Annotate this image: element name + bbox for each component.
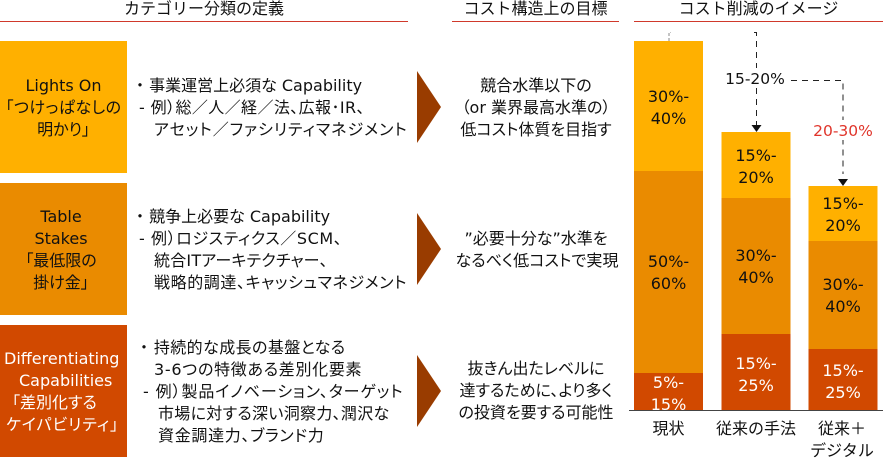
bar: current state xyxy=(634,41,703,414)
text block: Differentiating Capabilities definition: 資金調達力、ブランド力 xyxy=(158,426,324,445)
text block: row 3 goal: 抜きん出たレベルに xyxy=(468,359,604,378)
chart baseline xyxy=(629,410,883,412)
panel: Differentiating Capabilities category: Differentiating xyxy=(4,349,119,368)
bar: current state: 30%- xyxy=(648,87,689,106)
panel: Table Stakes category xyxy=(0,183,127,315)
text block: row 2 goal xyxy=(455,229,619,270)
text block: Table Stakes definition: ・ 競争上必要な Capability xyxy=(136,207,330,226)
text block: row 3 goal xyxy=(458,359,614,422)
callout: 20-30%: 20-30% xyxy=(813,122,873,140)
axis labels xyxy=(652,419,874,460)
bar: traditional method xyxy=(722,132,790,410)
heading: cost reduction image xyxy=(634,0,883,22)
bar: traditional plus digital xyxy=(808,186,878,410)
axis labels: 現状 xyxy=(652,419,685,438)
callout: 15-20%: 15-20% xyxy=(725,70,785,88)
panel: Differentiating Capabilities category: 「差別化する xyxy=(12,393,97,412)
icon: arrowhead to traditional bar xyxy=(752,125,762,132)
bar: current state: 40% xyxy=(651,109,686,128)
dashed reduction arrows xyxy=(669,32,843,174)
panel: Differentiating Capabilities category xyxy=(0,325,127,457)
text block: row 3 goal: の投資を要する可能性 xyxy=(458,403,614,422)
text block: Differentiating Capabilities definition: 市場に対する深い洞察力、潤沢な xyxy=(158,404,390,423)
text block: Table Stakes definition: 戦略的調達、キャッシュマネジメント xyxy=(154,273,407,292)
text block: Lights On definition: アセット／ファシリティマネジメント xyxy=(154,120,408,139)
heading: category definition xyxy=(0,0,408,22)
bar: current state: 50%- xyxy=(648,252,689,271)
bar: traditional method: 40% xyxy=(738,268,774,287)
panel: Table Stakes category: 「最低限の xyxy=(25,251,97,270)
panel: Table Stakes category: Stakes xyxy=(34,229,88,248)
bar: traditional plus digital: 15%- xyxy=(822,194,864,213)
text block: row 2 goal: ”必要十分な”水準を xyxy=(464,229,608,248)
text block: row 2 goal: なるべく低コストで実現 xyxy=(455,251,619,270)
bar: traditional plus digital: 15%- xyxy=(822,361,864,380)
text block: Table Stakes definition: - 例）ロジスティクス／SCM、 xyxy=(139,229,342,248)
text block: row 1 goal xyxy=(460,76,612,139)
text block: Differentiating Capabilities definition: 3-6つの特徴ある差別化要素 xyxy=(154,360,362,379)
bar: traditional plus digital: 25% xyxy=(825,383,861,402)
bar: traditional method: 15%- xyxy=(735,354,777,373)
text block: Differentiating Capabilities definition xyxy=(140,338,403,445)
axis labels: デジタル xyxy=(810,441,874,460)
axis labels: 従来＋ xyxy=(818,419,866,438)
text block: Lights On definition: ・ 事業運営上必須な Capability xyxy=(136,76,362,95)
text block: Differentiating Capabilities definition: ・ 持続的な成長の基盤となる xyxy=(140,338,346,357)
text block: row 1 goal: 競合水準以下の xyxy=(480,76,592,95)
panel: Differentiating Capabilities category: ケイパビリティ」 xyxy=(6,415,119,434)
bar: traditional method: 20% xyxy=(738,168,774,187)
bar: traditional method: 25% xyxy=(738,376,774,395)
bar: current state: 15% xyxy=(651,395,686,414)
text block: row 1 goal: 低コスト体質を目指す xyxy=(460,120,612,139)
arrow: row 1 xyxy=(417,71,441,143)
bar: traditional plus digital: 40% xyxy=(825,297,861,316)
text block: row 1 goal: （or 業界最高水準の） xyxy=(462,98,610,117)
text block: Table Stakes definition: 統合ITアーキテクチャー、 xyxy=(154,251,328,270)
panel: Table Stakes category: 掛け金」 xyxy=(33,273,89,292)
panel: Lights On category xyxy=(0,41,127,173)
text block: Table Stakes definition xyxy=(136,207,407,292)
bar: current state: 60% xyxy=(651,274,686,293)
panel: Lights On category: Lights On xyxy=(25,76,102,95)
text block: Lights On definition: - 例）総／人／経／法、広報･IR、 xyxy=(139,98,365,117)
panel: Table Stakes category: Table xyxy=(40,207,82,226)
bar: traditional method: 15%- xyxy=(735,146,777,165)
panel: Lights On category: 「つけっぱなしの xyxy=(5,98,122,117)
text block: Differentiating Capabilities definition: - 例）製品イノベーション、ターゲット xyxy=(143,382,403,401)
arrow: row 2 xyxy=(417,213,441,285)
panel: Differentiating Capabilities category: Capabilities xyxy=(19,371,112,390)
text block: Lights On definition xyxy=(136,76,408,139)
text block: row 3 goal: 達するために、より多く xyxy=(460,381,612,400)
icon: arrowhead to digital bar xyxy=(838,179,848,186)
bar: current state: 5%- xyxy=(653,373,684,392)
arrow: row 3 xyxy=(417,355,441,427)
bar: traditional plus digital: 30%- xyxy=(822,275,864,294)
bar: traditional plus digital: 20% xyxy=(825,216,861,235)
bar: traditional method: 30%- xyxy=(735,246,777,265)
panel: Lights On category: 明かり」 xyxy=(37,120,90,139)
axis labels: 従来の手法 xyxy=(716,419,796,438)
